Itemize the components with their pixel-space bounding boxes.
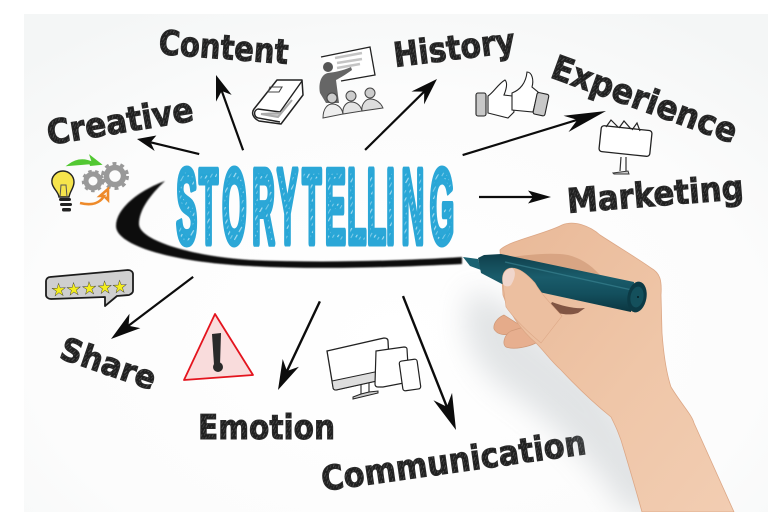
label: history: History bbox=[391, 21, 517, 76]
icon: computer, tablet and phone bbox=[327, 338, 421, 399]
label: communication: Communication bbox=[319, 423, 589, 500]
arrow: to emotion bbox=[270, 298, 328, 394]
lower fingers bbox=[494, 315, 523, 335]
arrow: to share bbox=[106, 270, 199, 346]
arrow: to content bbox=[208, 72, 251, 153]
icon: thumbs up bbox=[476, 72, 549, 118]
icon: five star rating bubble bbox=[46, 270, 133, 306]
heading: storytelling: STORYTELLING bbox=[176, 147, 454, 266]
icon: book bbox=[253, 80, 303, 124]
palm and arm bbox=[500, 223, 734, 512]
arrow: to history bbox=[359, 73, 443, 156]
icon: lightbulb, gears and arrows bbox=[52, 157, 128, 212]
hand shadow bbox=[464, 290, 690, 512]
arrow: to communication bbox=[394, 292, 465, 434]
arrow: to creative bbox=[135, 131, 201, 161]
finger shade above marker bbox=[505, 254, 600, 275]
hand holding marker bbox=[463, 223, 734, 512]
label: creative: Creative bbox=[44, 90, 196, 154]
label: marketing: Marketing bbox=[566, 168, 745, 222]
curled finger shade bbox=[548, 302, 585, 314]
icon: presenter with audience bbox=[319, 47, 383, 118]
arrow: to marketing bbox=[479, 190, 551, 204]
label: content: Content bbox=[157, 23, 290, 73]
thumb nail bbox=[502, 268, 515, 286]
icon: warning triangle bbox=[184, 314, 253, 380]
icon: five star rating bubble: ★★★★★ bbox=[51, 277, 128, 301]
label: share: Share bbox=[55, 330, 161, 398]
icon: billboard bbox=[599, 120, 652, 174]
label: experience: Experience bbox=[546, 48, 743, 152]
thumb bbox=[502, 268, 562, 343]
arrow: to experience bbox=[460, 103, 609, 164]
marker bbox=[463, 254, 649, 314]
label: emotion: Emotion bbox=[198, 408, 335, 448]
brush swoosh underline bbox=[116, 181, 462, 268]
